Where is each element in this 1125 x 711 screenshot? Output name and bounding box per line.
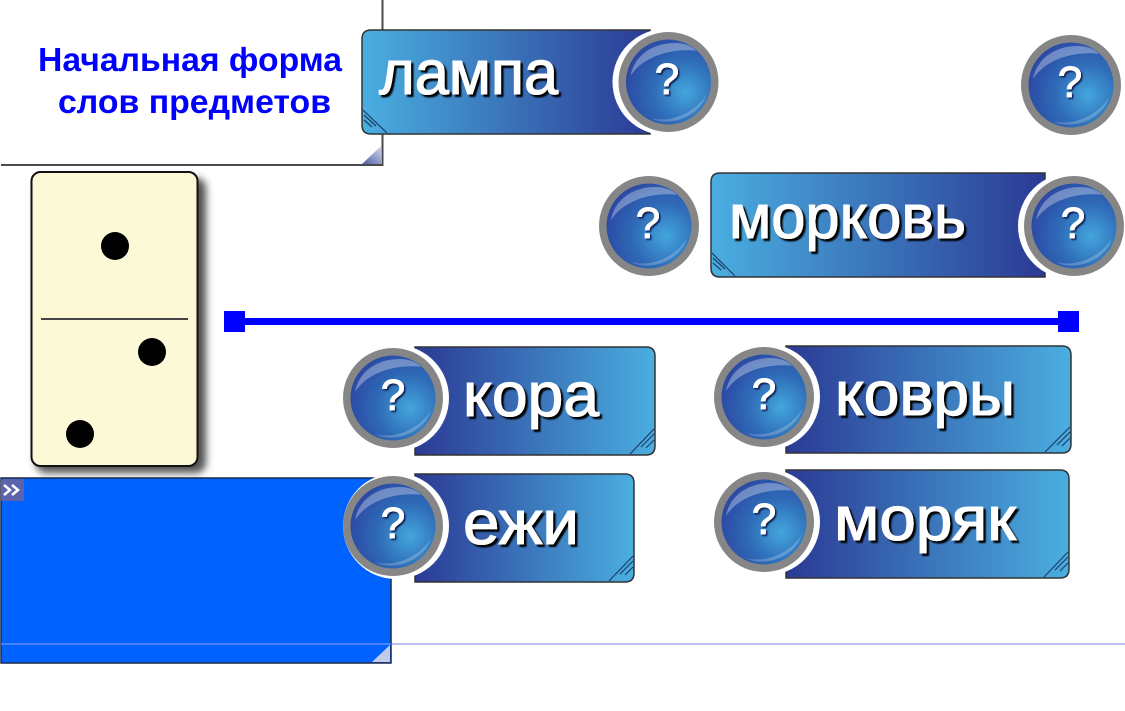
- button: question mark top right: [1021, 35, 1121, 135]
- button: кора: ?: [381, 371, 405, 420]
- bottom guide line: [0, 643, 1125, 645]
- button: question mark left of морковь: [599, 176, 699, 276]
- heading: слов предметов: [58, 83, 331, 120]
- button: ковры: [714, 344, 1071, 453]
- button: лампа: лампа: [379, 39, 559, 108]
- button: кора: [343, 345, 655, 455]
- button: ежи: [343, 473, 634, 582]
- heading: Начальная форма: [38, 41, 343, 78]
- button: ковры: ковры: [835, 360, 1015, 429]
- button: ежи: ?: [381, 499, 405, 548]
- icon: resize corner of heading box: [362, 146, 381, 164]
- icon: domino tile: [32, 172, 206, 473]
- button: морковь: [711, 173, 1124, 279]
- panel: blue answer box: [1, 478, 391, 663]
- button: ковры: ?: [752, 370, 776, 419]
- icon: resize corner of blue box: [372, 645, 390, 662]
- button: морковь: морковь: [729, 183, 966, 252]
- panel: heading box: [1, 0, 382, 165]
- button: моряк: моряк: [834, 485, 1017, 554]
- button: моряк: ?: [752, 495, 776, 544]
- button: лампа: ?: [655, 55, 679, 104]
- button: морковь: ?: [1061, 199, 1085, 248]
- blue divider line with handles: [224, 311, 1079, 332]
- button: ежи: ежи: [463, 489, 579, 558]
- button: question mark top right: ?: [1058, 58, 1082, 107]
- button: лампа: [362, 29, 718, 135]
- icon: expand chevrons: [1, 479, 24, 501]
- button: кора: кора: [463, 361, 600, 430]
- button: question mark left of морковь: ?: [636, 199, 660, 248]
- button: моряк: [714, 469, 1069, 578]
